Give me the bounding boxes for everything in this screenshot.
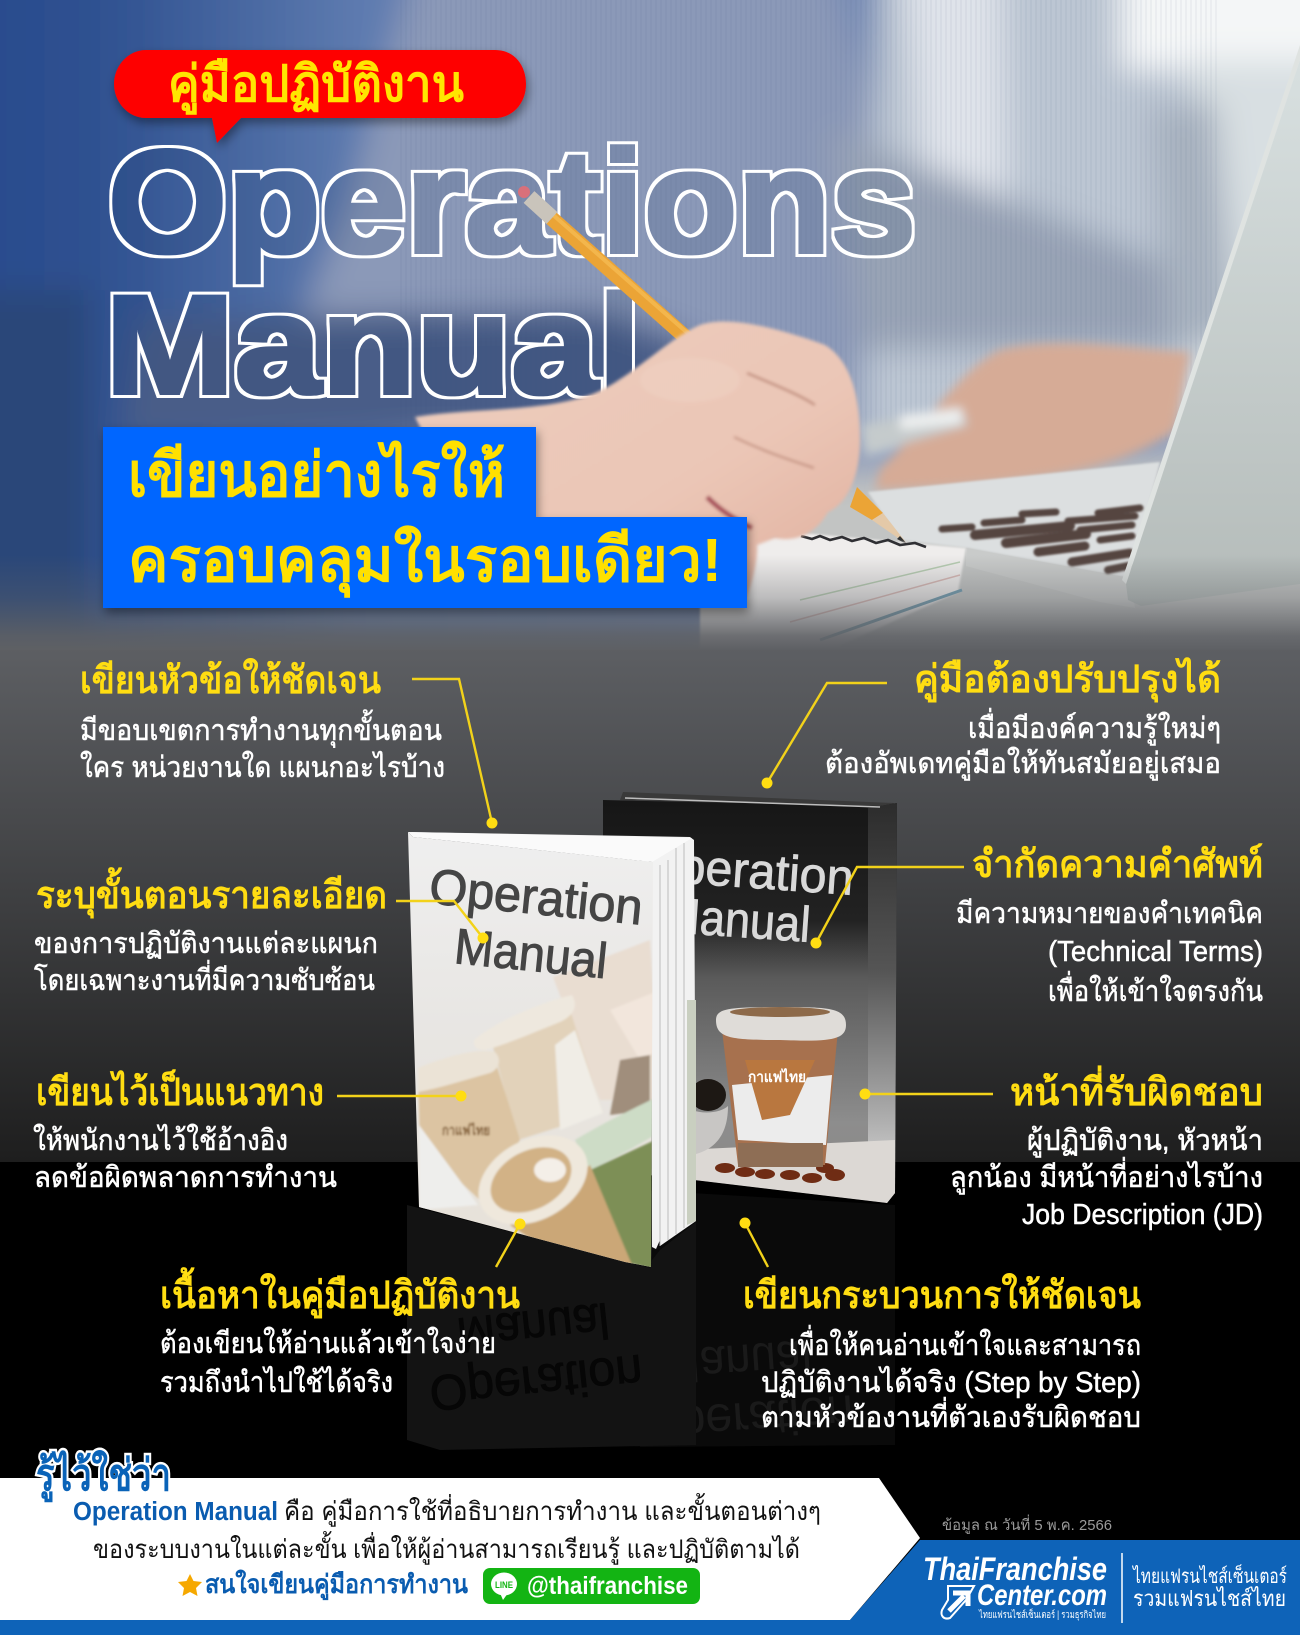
book: white front copy: กาแฟไทย	[442, 1121, 490, 1138]
photo: pencil	[518, 186, 908, 545]
cover photo: green cup	[590, 1140, 655, 1270]
logo: ThaiFranchise Center.com: ThaiFranchise	[923, 1551, 1107, 1587]
source date: ข้อมูล ณ วันที่ 5 พ.ค. 2566	[942, 1514, 1112, 1534]
back cover scene: table	[680, 1140, 895, 1203]
title: Operations Manual	[109, 141, 915, 400]
tagline	[1131, 1563, 1287, 1611]
callout: เขียนหัวข้อให้ชัดเจน: เขียนหัวข้อให้ชัดเจน	[80, 658, 381, 702]
callout: เขียนไว้เป็นแนวทาง: ลดข้อผิดพลาดการทำงาน	[34, 1162, 337, 1194]
callout: เนื้อหาในคู่มือปฏิบัติงาน: เนื้อหาในคู่มือปฏิบัติงาน	[160, 1267, 520, 1319]
callout: ระบุขั้นตอนรายละเอียด: โดยเฉพาะงานที่มีความซับซ้อน	[34, 960, 375, 997]
heading: รู้ไว้ใช่ว่า: รู้ไว้ใช่ว่า	[36, 1449, 171, 1502]
badge: red speech bubble: คู่มือปฏิบัติงาน	[168, 56, 464, 115]
LINE button	[483, 1568, 700, 1604]
note line 1	[73, 1493, 821, 1527]
title: Operations Manual: Operations	[108, 120, 916, 283]
callout: เขียนหัวข้อให้ชัดเจน	[80, 658, 498, 828]
callout: เขียนกระบวนการให้ชัดเจน: เพื่อให้คนอ่านเข้าใจและสามารถ	[789, 1325, 1141, 1362]
callout: จำกัดความคำศัพท์: มีความหมายของคำเทคนิค	[956, 898, 1263, 930]
subtitle: blue boxes	[103, 427, 747, 608]
callout: ระบุขั้นตอนรายละเอียด	[34, 867, 488, 997]
front cover	[408, 832, 653, 1267]
callout: เขียนกระบวนการให้ชัดเจน: ปฏิบัติงานได้จริง (Step by Step)	[761, 1365, 1141, 1399]
callout: เขียนกระบวนการให้ชัดเจน: เขียนกระบวนการให้ชัดเจน	[743, 1273, 1141, 1317]
back cover scene: bowl	[696, 1106, 728, 1154]
callout: คู่มือต้องปรับปรุงได้: ต้องอัพเดทคู่มือให้ทันสมัยอยู่เสมอ	[825, 746, 1221, 781]
note line 1: คือ คู่มือการใช้ที่อธิบายการทำงาน และขั้นตอนต่างๆ	[284, 1493, 821, 1527]
back cover scene: coffee cup	[722, 1030, 838, 1165]
callout: เขียนกระบวนการให้ชัดเจน: ตามหัวข้องานที่ตัวเองรับผิดชอบ	[761, 1397, 1141, 1434]
callout: เขียนหัวข้อให้ชัดเจน: มีขอบเขตการทำงานทุกขั้นตอน	[80, 709, 442, 748]
book: black back copy: Operation	[639, 835, 856, 906]
callout: ระบุขั้นตอนรายละเอียด: ของการปฏิบัติงานแต่ละแผนก	[34, 928, 378, 960]
cover title: Operation	[427, 858, 645, 936]
panel: did-you-know note	[0, 1449, 920, 1620]
callout: หน้าที่รับผิดชอบ: ผู้ปฏิบัติงาน, หัวหน้า	[1027, 1125, 1263, 1158]
callout: เขียนไว้เป็นแนวทาง: เขียนไว้เป็นแนวทาง	[36, 1069, 324, 1114]
callout: เนื้อหาในคู่มือปฏิบัติงาน: ต้องเขียนให้อ่านแล้วเข้าใจง่าย	[160, 1326, 496, 1360]
photo: shirt stripes	[1125, 0, 1217, 68]
footer: blue logo bar	[0, 1540, 1300, 1635]
subtitle: blue boxes: เขียนอย่างไรให้	[128, 440, 505, 509]
book reflections: Operation	[427, 1344, 646, 1422]
note line 1: Operation Manual	[73, 1498, 278, 1526]
contact text: สนใจเขียนคู่มือการทำงาน	[205, 1569, 469, 1601]
photo: blurred office scene, pencil and hands	[0, 0, 1300, 700]
cover photo: faded top cup	[553, 940, 660, 1100]
book reflections	[407, 1190, 895, 1455]
page block	[408, 832, 696, 1249]
callout: หน้าที่รับผิดชอบ	[860, 1065, 1263, 1231]
photo: notebook	[700, 533, 966, 650]
photo: laptop	[868, 45, 1300, 608]
title: Operations Manual: Manual	[105, 266, 641, 423]
callout: จำกัดความคำศัพท์: (Technical Terms)	[1048, 936, 1263, 968]
LINE button: @thaifranchise	[527, 1572, 688, 1600]
background gradient	[0, 640, 1300, 1635]
callout: เนื้อหาในคู่มือปฏิบัติงาน: รวมถึงนำไปใช้ได้จริง	[160, 1365, 393, 1399]
book reflections: Manual	[454, 1292, 612, 1364]
callout: เขียนไว้เป็นแนวทาง	[33, 1069, 466, 1194]
LINE button: LINE	[495, 1580, 513, 1590]
cover photo: left cup	[418, 1060, 520, 1200]
book: black back copy: กาแฟไทย	[748, 1067, 806, 1086]
callout: จำกัดความคำศัพท์	[810, 843, 1263, 1008]
subtitle: blue boxes: ครอบคลุมในรอบเดียว!	[128, 525, 722, 598]
book reflections: Manual	[660, 1329, 814, 1395]
photo: shirt and room	[0, 0, 1300, 700]
keyboard keys	[942, 508, 1140, 570]
callout: จำกัดความคำศัพท์: เพื่อให้เข้าใจตรงกัน	[1048, 971, 1263, 1008]
back cover scene: beans	[715, 1163, 845, 1183]
callout: หน้าที่รับผิดชอบ: Job Description (JD)	[1022, 1199, 1263, 1231]
icon: star	[178, 1574, 202, 1596]
icon: logo arrow	[941, 1586, 974, 1619]
callout: คู่มือต้องปรับปรุงได้	[762, 657, 1221, 788]
logo: ThaiFranchise Center.com: Center.com	[977, 1579, 1107, 1612]
cover photo: round lid	[477, 1142, 589, 1226]
logo: ThaiFranchise Center.com: ไทยแฟรนไชส์เซ็นเตอร์ | รวมธุรกิจไทย	[978, 1607, 1106, 1621]
badge: red speech bubble	[114, 50, 526, 143]
callout: เขียนไว้เป็นแนวทาง: ให้พนักงานไว้ใช้อ้างอิง	[33, 1123, 288, 1157]
callout: ระบุขั้นตอนรายละเอียด: ระบุขั้นตอนรายละเอียด	[36, 867, 387, 919]
callout: เนื้อหาในคู่มือปฏิบัติงาน	[160, 1218, 526, 1399]
photo: other hand holding phone	[862, 343, 1190, 490]
cover photo: tan cup side	[510, 1165, 632, 1265]
photo: fade into dark	[0, 555, 1300, 650]
callout: คู่มือต้องปรับปรุงได้: เมื่อมีองค์ความรู้ใหม่ๆ	[968, 708, 1221, 746]
callout: หน้าที่รับผิดชอบ: ลูกน้อง มีหน้าที่อย่างไรบ้าง	[950, 1157, 1263, 1195]
callout: เขียนหัวข้อให้ชัดเจน: ใคร หน่วยงานใด แผนกอะไรบ้าง	[80, 750, 445, 784]
cover title	[421, 858, 645, 992]
book: black back copy: Manual	[661, 887, 812, 953]
book reflections: Operation	[639, 1384, 856, 1455]
cover photo: middle cup	[493, 1015, 581, 1140]
callout: เขียนกระบวนการให้ชัดเจน	[740, 1218, 1141, 1434]
note line 2: ของระบบงานในแต่ละขั้น เพื่อให้ผู้อ่านสามารถเรียนรู้ และปฏิบัติตามได้	[93, 1531, 800, 1565]
photo: writing hand	[415, 322, 860, 600]
callout: จำกัดความคำศัพท์: จำกัดความคำศัพท์	[972, 843, 1263, 886]
cover title: Manual	[452, 918, 610, 989]
book: white front copy	[408, 832, 696, 1270]
book: black back copy	[603, 792, 897, 1203]
logo: ThaiFranchise Center.com	[923, 1551, 1107, 1621]
callout: คู่มือต้องปรับปรุงได้: คู่มือต้องปรับปรุงได้	[914, 657, 1221, 703]
callout: หน้าที่รับผิดชอบ: หน้าที่รับผิดชอบ	[1010, 1065, 1263, 1114]
